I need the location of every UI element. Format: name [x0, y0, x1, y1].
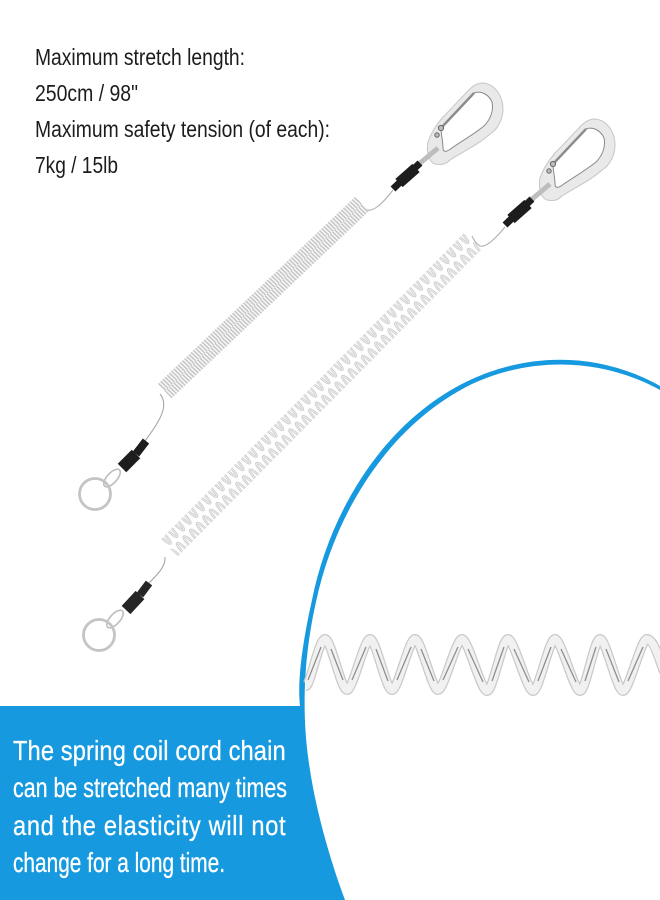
- callout text: and the elasticity will not: [13, 811, 286, 841]
- icon: carabiner right cord: [539, 119, 615, 201]
- crimp sleeve right bottom: [126, 583, 149, 610]
- callout text: can be stretched many times: [13, 772, 287, 803]
- coil cord: relaxed: [80, 83, 503, 510]
- specifications text: 250cm / 98": [35, 80, 138, 106]
- specifications text: Maximum safety tension (of each):: [35, 116, 330, 142]
- specifications text: Maximum stretch length:: [35, 44, 245, 70]
- blue panel: [0, 360, 660, 900]
- wire left cord bottom: [145, 394, 164, 441]
- wire left cord top: [358, 190, 393, 210]
- icon: carabiner left cord: [427, 83, 503, 165]
- link left bottom: [101, 466, 123, 490]
- crimp sleeve left cord: [393, 163, 420, 189]
- crimp sleeve left bottom: [122, 441, 146, 468]
- spring close-up: [306, 639, 660, 691]
- link right cord: [531, 184, 550, 200]
- coil outer: [306, 639, 660, 691]
- callout text: change for a long time.: [13, 847, 225, 878]
- coil shading: [308, 647, 643, 682]
- callout text: [13, 736, 287, 878]
- crimp sleeve right cord: [505, 199, 532, 225]
- link right bottom: [104, 607, 126, 631]
- specifications text: 7kg / 15lb: [35, 152, 118, 178]
- link left cord: [419, 148, 438, 164]
- callout text: The spring coil cord chain: [13, 736, 286, 766]
- tight coil: [158, 197, 369, 398]
- wire right cord bottom: [148, 557, 165, 584]
- wire right cord top: [472, 227, 505, 246]
- coil highlight: [306, 639, 660, 691]
- icon: split ring left cord: [80, 478, 110, 510]
- coil cord: stretched: [84, 119, 615, 650]
- specifications text: [35, 44, 330, 178]
- loose coil: [161, 233, 482, 557]
- icon: split ring right cord: [84, 620, 114, 650]
